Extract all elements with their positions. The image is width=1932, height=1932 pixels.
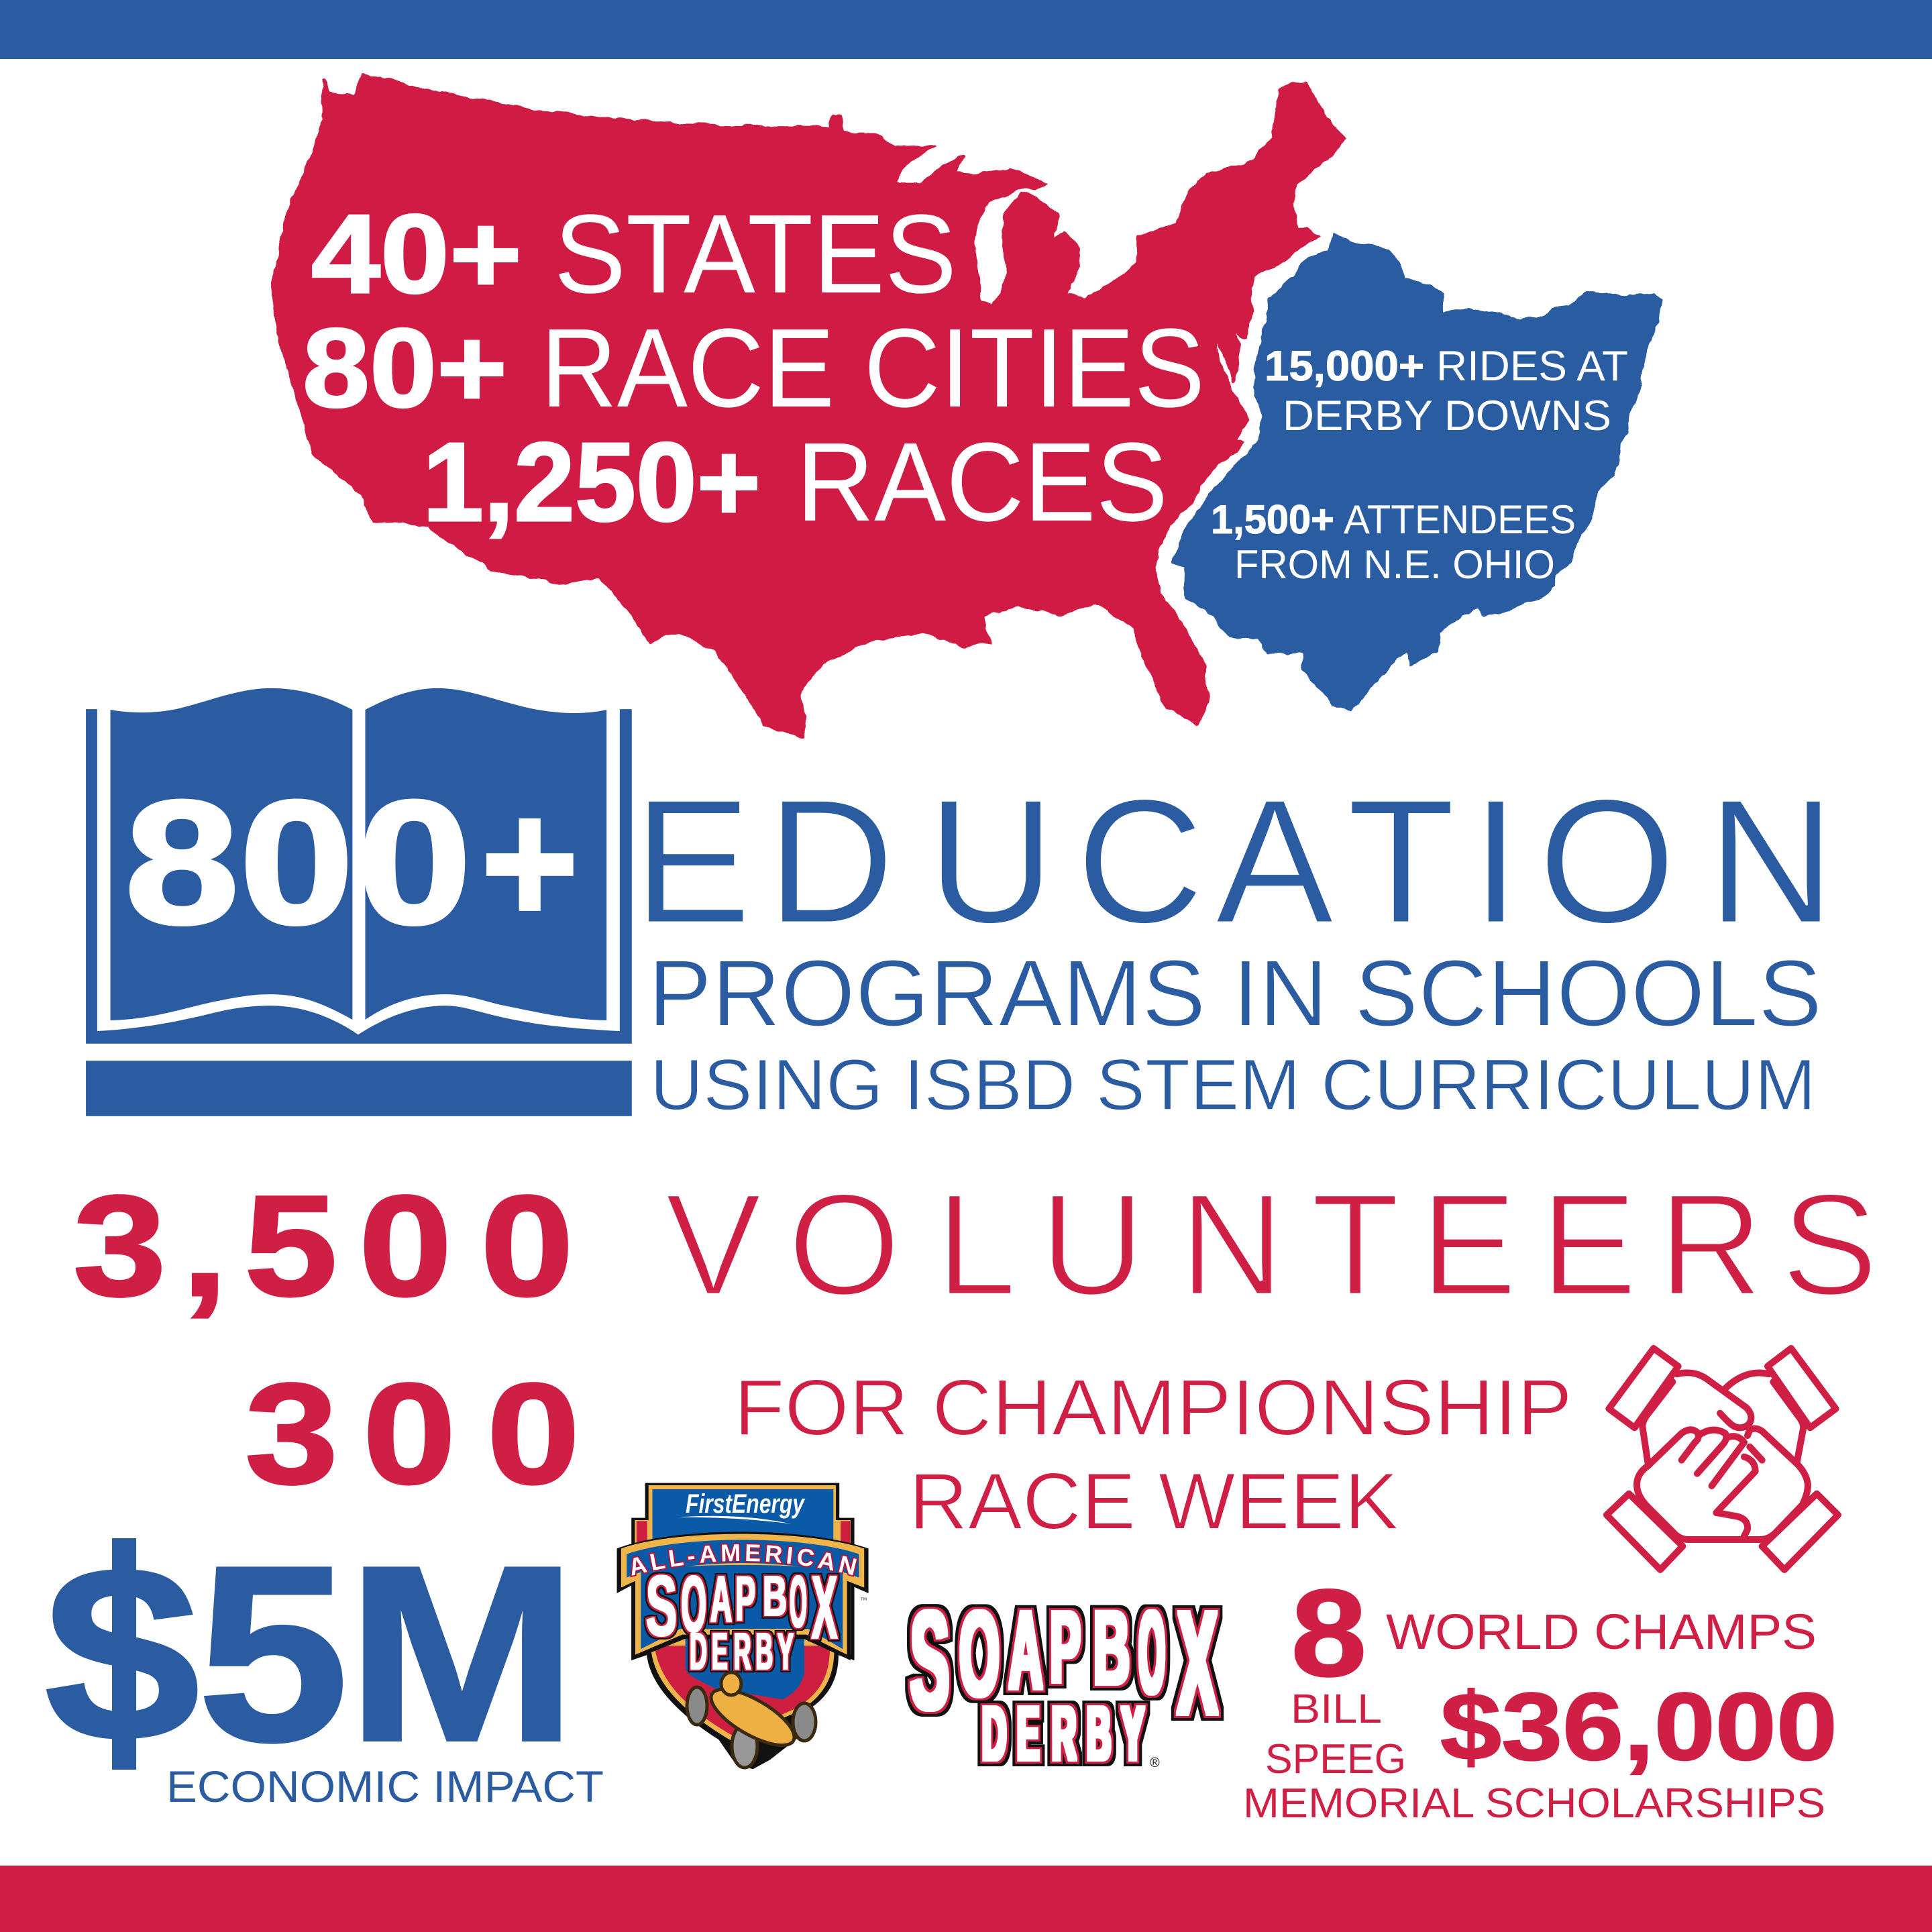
subheading: using ISBD STEM curriculum: USING ISBD STEM CURRICULUM (650, 1044, 1816, 1125)
logo trademark: ™ (860, 1597, 867, 1605)
logo sponsor name: FirstEnergy (686, 1489, 805, 1519)
stat: $5M: 5 (197, 1514, 349, 1794)
map stats: 80+ race cities: 80+ (303, 306, 507, 431)
label: Bill Speeg: SPEEG (1265, 1736, 1406, 1782)
logo: Soap Box Derby wordmark: O (1139, 1588, 1165, 1718)
map stats: 40+ states: STATES (554, 192, 957, 317)
logo wordmark: X (812, 1557, 837, 1658)
icon: four joined hands (1607, 1348, 1838, 1570)
label: economic impact: ECONOMIC IMPACT (166, 1762, 604, 1811)
Ohio stat: 15,000+ rides: RIDES AT (1436, 343, 1628, 390)
label: world champs: WORLD CHAMPS (1386, 1604, 1817, 1660)
Ohio stat: 15,000+ rides: 15,000+ (1265, 343, 1424, 390)
logo wordmark: O (681, 1560, 706, 1649)
logo wordmark: S (646, 1558, 677, 1654)
label: for championship race week (734, 1363, 1572, 1546)
logo: FirstEnergy All-American Soap Box Derby shield (617, 1483, 869, 1770)
map stats: 40+ states (311, 192, 957, 317)
subheading: programs in schools: PROGRAMS IN SCHOOLS (648, 940, 1822, 1046)
logo: Soap Box Derby wordmark: S (910, 1582, 949, 1738)
logo: Soap Box Derby wordmark: DERBY (982, 1691, 1144, 1776)
bottom red band (0, 1866, 1932, 1932)
logo: Soap Box Derby wordmark: X (1177, 1580, 1218, 1746)
logo: Soap Box Derby wordmark: B (1093, 1589, 1130, 1706)
logo wordmark (646, 1557, 837, 1680)
logo car (687, 1672, 816, 1768)
Ohio stat: 1,500+ attendees (1211, 497, 1576, 587)
map stats: 80+ race cities: RACE CITIES (541, 306, 1205, 431)
logo wordmark: O (790, 1562, 807, 1643)
logo: Soap Box Derby wordmark: A (1009, 1588, 1042, 1712)
Ohio stat: 1,500+ attendees: FROM N.E. OHIO (1234, 542, 1555, 587)
800+ figure: + (481, 765, 578, 961)
map stats: 1,250+ races (423, 420, 1168, 545)
label: Bill Speeg: BILL (1291, 1686, 1382, 1731)
label: for championship race week: FOR CHAMPIONSHIP (734, 1363, 1572, 1452)
map: Ohio (1172, 234, 1661, 710)
Ohio stat: 1,500+ attendees: ATTENDEES (1344, 497, 1576, 542)
logo: Soap Box Derby wordmark: O (959, 1587, 1000, 1721)
logo arc text: ALL-AMERICAN (631, 1543, 859, 1578)
heading: education: EDUCATION (633, 762, 1835, 960)
icon: open book with 800+ (86, 688, 632, 1116)
stat: $5M: $ (44, 1514, 200, 1794)
stat: 8: 8 (1291, 1564, 1366, 1703)
label: Bill Speeg (1265, 1686, 1406, 1782)
Ohio stat: 15,000+ rides (1265, 343, 1628, 439)
map stats: 1,250+ races: RACES (796, 420, 1168, 545)
stat: $5M (44, 1514, 578, 1794)
stat: 3,500: 3,500 (73, 1166, 574, 1326)
800+ figure: 800 (125, 765, 472, 961)
Ohio stat: 15,000+ rides: DERBY DOWNS (1283, 392, 1611, 439)
top blue band (0, 0, 1932, 59)
logo: Soap Box Derby wordmark: P (1050, 1590, 1081, 1703)
logo wordmark: B (763, 1564, 787, 1627)
logo wordmark: DERBY (690, 1623, 794, 1680)
stat: 300: 300 (245, 1354, 580, 1514)
logo wordmark: P (735, 1563, 755, 1633)
Ohio stat: 1,500+ attendees: 1,500+ (1211, 497, 1334, 542)
logo wordmark: A (710, 1564, 732, 1636)
stat: $36,000: $36,000 (1440, 1674, 1837, 1780)
label: for championship race week: RACE WEEK (909, 1456, 1399, 1546)
map: United States (273, 74, 1344, 737)
label: memorial scholarships: MEMORIAL SCHOLARSHIPS (1243, 1780, 1825, 1827)
label: volunteers: VOLUNTEERS (665, 1163, 1878, 1326)
stat: $5M: M (346, 1514, 578, 1794)
map stats: 40+ states: 40+ (311, 192, 522, 317)
registered mark: ® (1150, 1756, 1160, 1770)
map stats: 1,250+ races: 1,250+ (423, 420, 761, 545)
logo: Soap Box Derby wordmark (910, 1580, 1218, 1776)
